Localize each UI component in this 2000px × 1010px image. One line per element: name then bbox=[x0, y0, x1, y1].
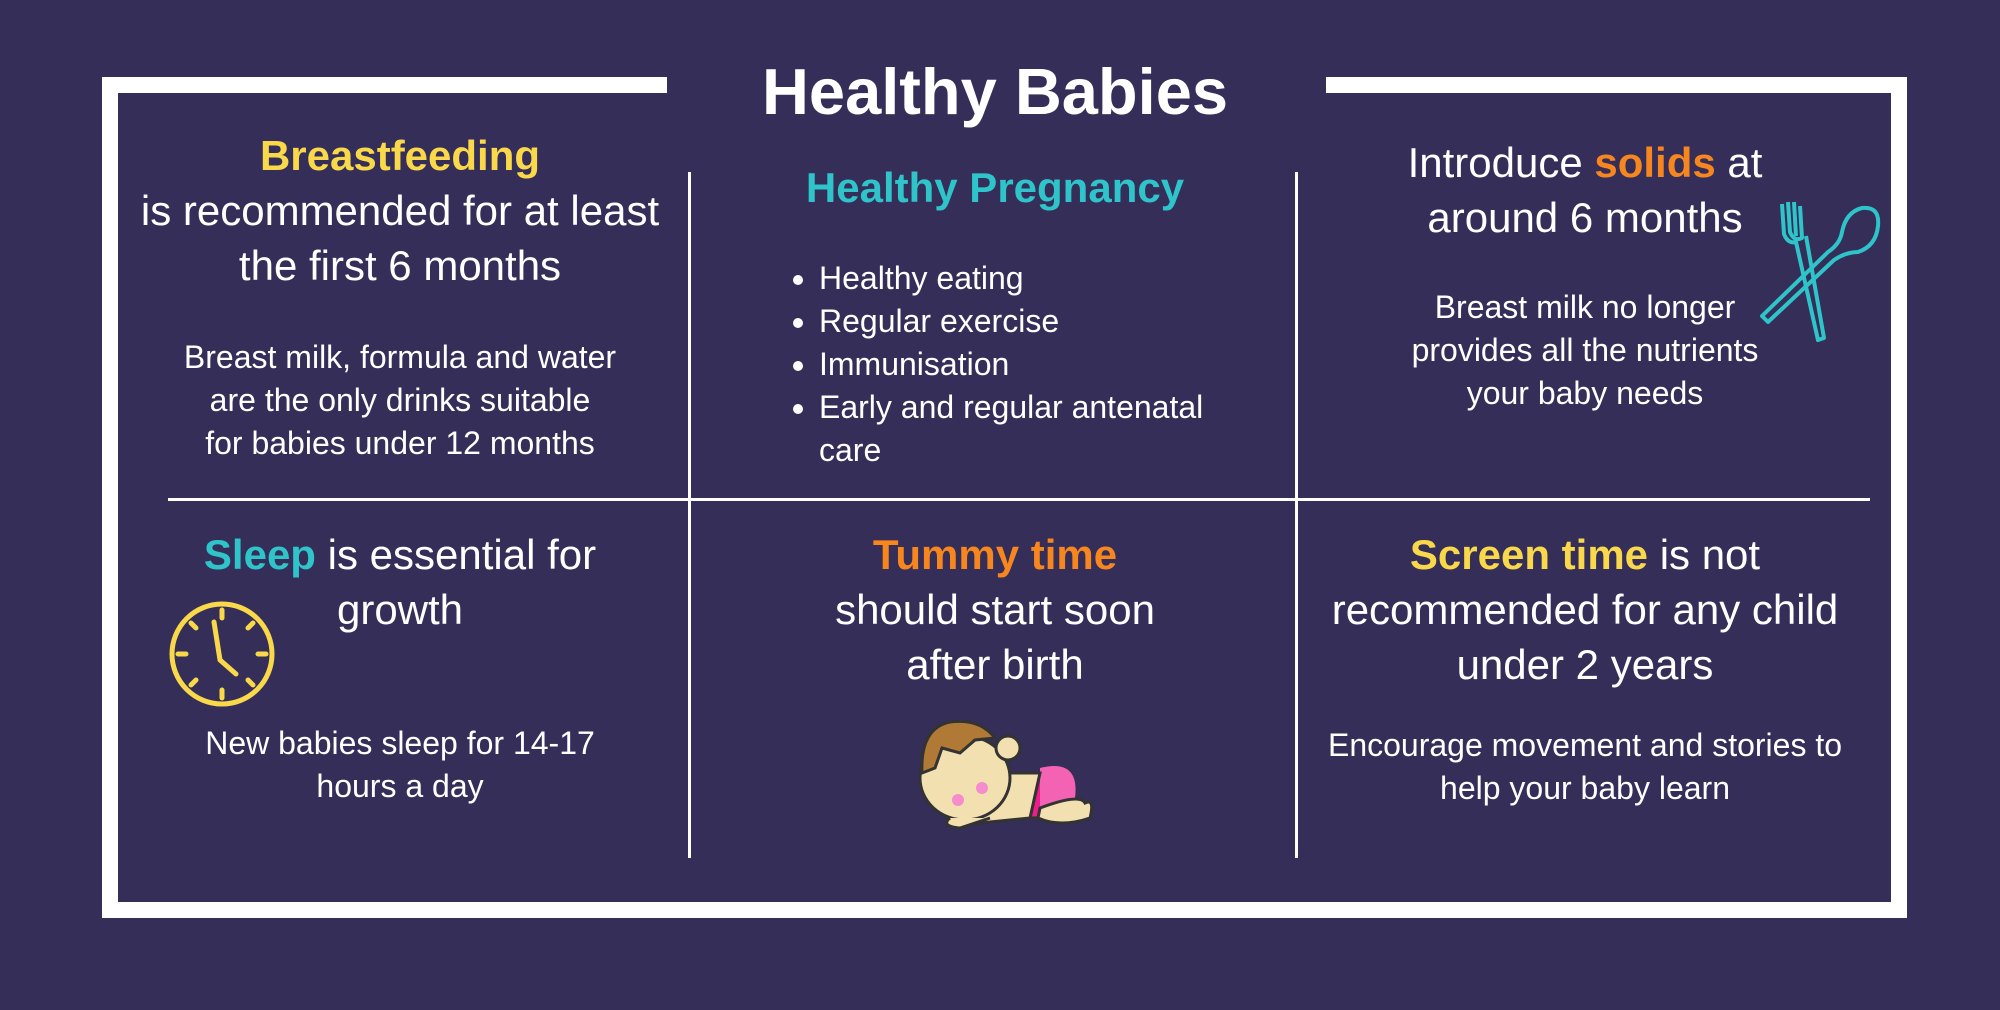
panel: solids: Breast milk no longer bbox=[1435, 289, 1735, 325]
panel: screen time: under 2 years bbox=[1457, 641, 1713, 688]
panel: screen time: Encourage movement and stories to bbox=[1328, 727, 1842, 763]
panel: tummy time: should start soon bbox=[835, 586, 1155, 633]
panel: breastfeeding: are the only drinks suitable bbox=[210, 382, 590, 418]
bullet list: Early and regular antenatal care bbox=[819, 389, 1203, 468]
panel: screen time bbox=[1328, 531, 1842, 806]
panel: breastfeeding: for babies under 12 months bbox=[205, 425, 595, 461]
panel: sleep: Sleep is essential for bbox=[204, 531, 596, 578]
panel: sleep: growth bbox=[337, 586, 463, 633]
panel: tummy time: after birth bbox=[906, 641, 1084, 688]
panel: sleep bbox=[204, 531, 596, 804]
panel: tummy time bbox=[835, 531, 1155, 688]
icon: baby bbox=[918, 720, 1094, 830]
panel: healthy pregnancy bbox=[793, 164, 1203, 468]
panel: solids: Introduce solids at bbox=[1408, 139, 1762, 186]
panel: solids bbox=[1408, 139, 1762, 411]
panel: breastfeeding: Breast milk, formula and water bbox=[184, 339, 616, 375]
panel: screen time: recommended for any child bbox=[1332, 586, 1838, 633]
panel: breastfeeding bbox=[141, 132, 659, 461]
panel: screen time: help your baby learn bbox=[1440, 770, 1730, 806]
frame bbox=[102, 77, 1907, 918]
bullet list: Immunisation bbox=[819, 346, 1009, 382]
panel: solids: provides all the nutrients bbox=[1412, 332, 1758, 368]
bullet list bbox=[793, 260, 1203, 468]
panel: sleep: hours a day bbox=[316, 768, 484, 804]
icon: clock bbox=[170, 602, 274, 706]
bullet list: Regular exercise bbox=[819, 303, 1059, 339]
panel: tummy time: Tummy time bbox=[873, 531, 1117, 578]
heading: Healthy Pregnancy bbox=[806, 164, 1184, 211]
panel: sleep: New babies sleep for 14-17 bbox=[205, 725, 595, 761]
icon: fork and spoon bbox=[1760, 202, 1880, 342]
panel: breastfeeding: Breastfeeding bbox=[260, 132, 540, 179]
panel: solids: your baby needs bbox=[1467, 375, 1703, 411]
bullet list: Healthy eating bbox=[819, 260, 1024, 296]
title: Healthy Babies bbox=[762, 55, 1228, 128]
panel: screen time: Screen time is not bbox=[1410, 531, 1760, 578]
panel: solids: around 6 months bbox=[1427, 194, 1743, 241]
panel: breastfeeding: is recommended for at least bbox=[141, 187, 659, 234]
panel: breastfeeding: the first 6 months bbox=[239, 242, 561, 289]
